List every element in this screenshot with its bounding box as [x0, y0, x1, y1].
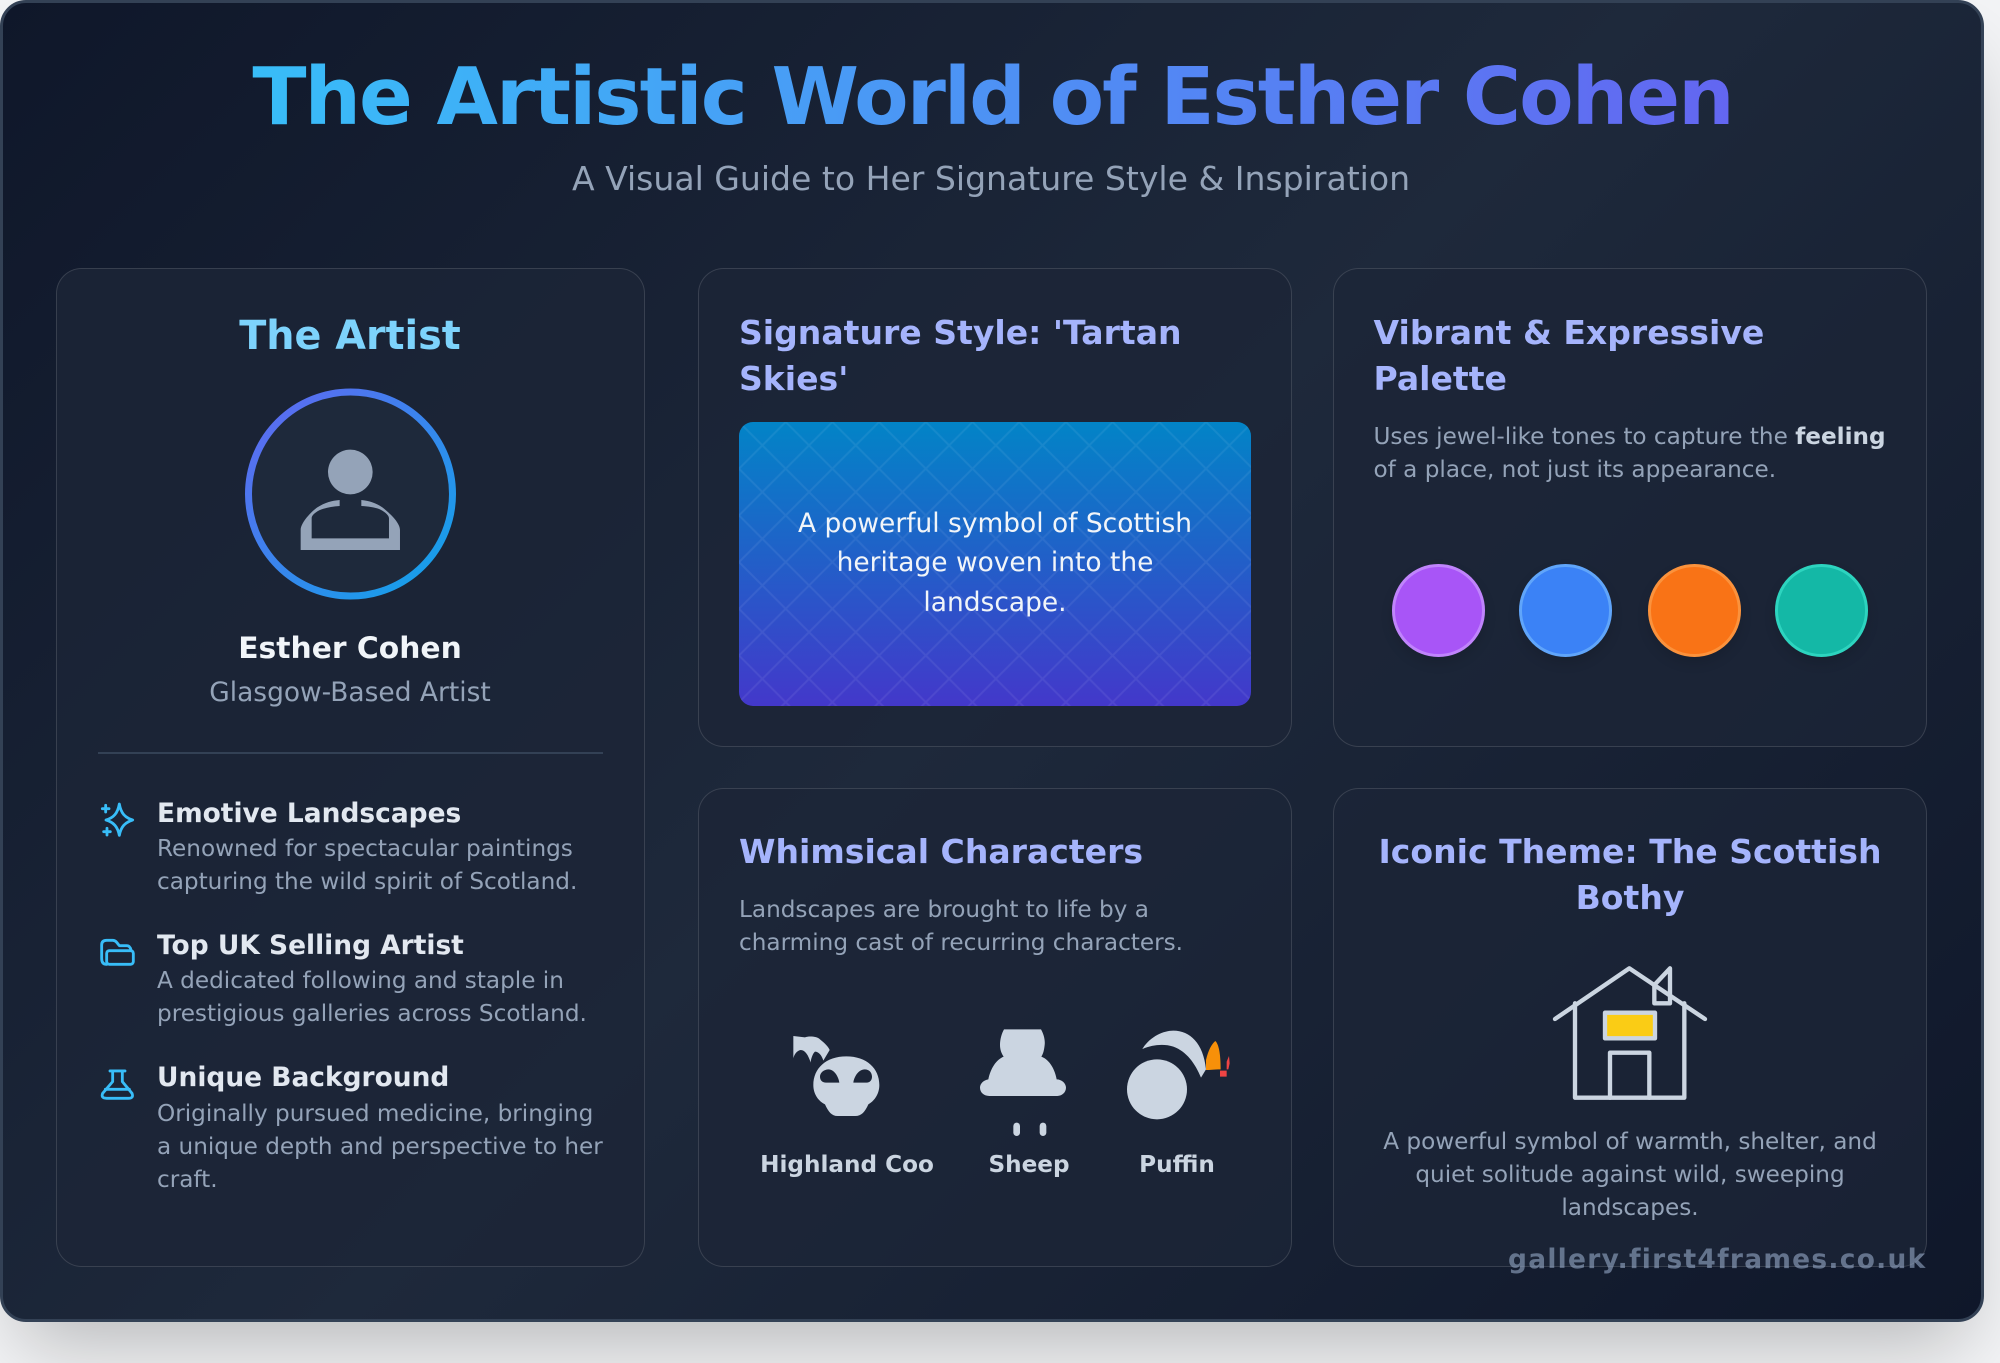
tartan caption: landscape.	[923, 587, 1067, 618]
text: top uk selling artist: prestigious galleries across Scotland.	[157, 1001, 587, 1027]
icon: person	[301, 450, 400, 550]
subtitle: A Visual Guide to Her Signature Style & Inspiration	[572, 159, 1410, 198]
colour swatch: purple	[1392, 564, 1484, 656]
tartan swatch	[739, 422, 1251, 706]
text: emotive landscapes: Emotive Landscapes	[157, 798, 461, 829]
text: top uk selling artist	[157, 930, 587, 1027]
heading: bothy: Iconic Theme: The Scottish	[1378, 832, 1882, 871]
label: sheep: Sheep	[988, 1152, 1070, 1178]
heading: signature style: Signature Style: 'Tartan	[739, 312, 1182, 352]
bothy description	[1383, 1128, 1877, 1220]
text: emotive landscapes: Renowned for spectacular paintings	[157, 836, 573, 862]
heading: signature style: Skies'	[739, 358, 848, 398]
icon: sparkles	[100, 802, 134, 837]
heading: signature style	[739, 312, 1182, 398]
artist portrait	[245, 388, 456, 600]
icon: highland coo	[793, 1036, 880, 1116]
palette description: Uses jewel-like tones to capture the feeling	[1374, 424, 1886, 450]
icon: puffin	[1127, 1030, 1230, 1120]
title: The Artistic World of Esther Cohen	[252, 50, 1733, 142]
icon: bothy house	[1552, 966, 1708, 1100]
tartan caption	[798, 508, 1192, 618]
text: unique background: Originally pursued medicine, bringing	[157, 1101, 593, 1127]
whimsical description	[739, 897, 1183, 956]
panel: signature style	[698, 268, 1292, 747]
heading: the artist: The Artist	[239, 313, 461, 359]
palette description	[1374, 424, 1886, 483]
text: unique background: Unique Background	[157, 1062, 449, 1093]
text: top uk selling artist: A dedicated following and staple in	[157, 968, 564, 994]
heading: palette: Palette	[1374, 358, 1507, 398]
heading: whimsical characters: Whimsical Characters	[739, 832, 1143, 871]
label: puffin: Puffin	[1139, 1152, 1215, 1178]
colour swatch: teal	[1775, 564, 1868, 656]
artist name: Esther Cohen	[238, 631, 462, 666]
tartan caption: heritage woven into the	[837, 547, 1153, 578]
tartan caption: A powerful symbol of Scottish	[798, 508, 1192, 539]
icon: flask	[100, 1070, 134, 1100]
text: unique background: a unique depth and perspective to her	[157, 1134, 603, 1160]
text: emotive landscapes	[157, 798, 577, 895]
palette description: of a place, not just its appearance.	[1374, 457, 1776, 483]
item: top uk selling artist	[100, 930, 587, 1027]
text: unique background	[157, 1062, 603, 1193]
whimsical description: Landscapes are brought to life by a	[739, 897, 1149, 923]
item: emotive landscapes	[100, 798, 577, 895]
icon: sheep	[980, 1029, 1066, 1136]
heading: palette: Vibrant & Expressive	[1374, 312, 1764, 352]
panel: palette	[1333, 268, 1927, 747]
artist role: Glasgow-Based Artist	[209, 677, 491, 708]
text: unique background: craft.	[157, 1167, 218, 1193]
whimsical description: charming cast of recurring characters.	[739, 930, 1183, 956]
colour swatch: blue	[1519, 564, 1612, 656]
panel: whimsical characters	[698, 788, 1292, 1267]
bothy description: A powerful symbol of warmth, shelter, and	[1383, 1128, 1877, 1154]
heading: bothy	[1378, 832, 1882, 917]
icon: folder	[100, 938, 135, 966]
heading: palette	[1374, 312, 1764, 398]
text: emotive landscapes: capturing the wild spirit of Scotland.	[157, 869, 577, 895]
panel: scottish bothy	[1333, 788, 1927, 1267]
watermark: gallery.first4frames.co.uk	[1508, 1244, 1926, 1275]
item: unique background	[100, 1062, 603, 1193]
heading: bothy: Bothy	[1576, 878, 1684, 917]
colour swatch: orange	[1648, 564, 1740, 656]
text: top uk selling artist: Top UK Selling Artist	[157, 930, 464, 961]
bothy description: quiet solitude against wild, sweeping	[1415, 1162, 1845, 1188]
bothy description: landscapes.	[1561, 1194, 1699, 1220]
panel: the artist	[56, 268, 645, 1267]
label: highland coo: Highland Coo	[760, 1152, 934, 1178]
